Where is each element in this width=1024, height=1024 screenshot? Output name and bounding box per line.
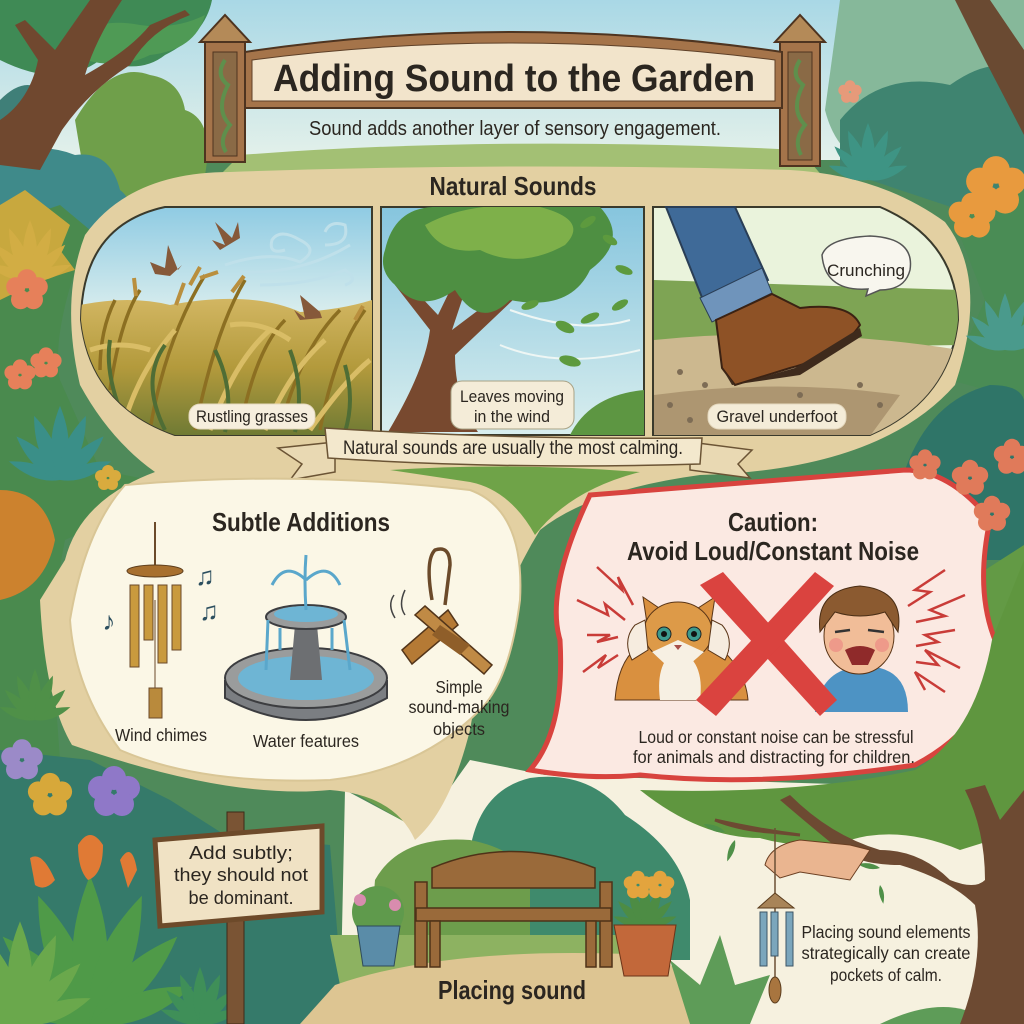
heading: placing sound: Placing sound xyxy=(438,975,586,1005)
heading: subtle additions: Subtle Additions xyxy=(212,507,390,537)
heading: natural sounds: Natural Sounds xyxy=(430,171,596,201)
winding path xyxy=(40,166,970,840)
panel: gravel underfoot xyxy=(653,207,960,436)
text: placing description xyxy=(802,922,971,985)
label: gravel underfoot xyxy=(708,404,846,429)
flowers: right side xyxy=(827,80,1024,531)
top-left foliage xyxy=(0,0,212,75)
icon: hand holding chime xyxy=(758,828,870,1003)
heading: caution: Caution: xyxy=(728,507,818,537)
green wedge under subtle panel xyxy=(350,770,445,828)
icon: music notes: ♫ xyxy=(195,561,215,591)
text: placing description: Placing sound elements xyxy=(802,922,971,942)
right tree top xyxy=(955,0,1024,135)
icon: fountain xyxy=(225,555,387,720)
sign: add subtly: they should not xyxy=(174,864,308,885)
panel: rustling grasses xyxy=(80,207,372,436)
label: simple sound-making objects: objects xyxy=(433,719,485,739)
banner: natural sounds are calming: Natural sounds are usually the most calming. xyxy=(343,438,683,459)
label: rustling grasses xyxy=(189,404,315,429)
icon: birds xyxy=(150,222,322,320)
icon: music notes xyxy=(102,561,219,636)
heading: caution: Avoid Loud/Constant Noise xyxy=(627,536,919,566)
sign: add subtly: Add subtly; xyxy=(189,842,293,863)
sign: add subtly: be dominant. xyxy=(188,887,294,908)
text: caution description: for animals and distracting for children. xyxy=(633,747,915,767)
title: Adding Sound to the Garden xyxy=(273,58,755,100)
grass tuft xyxy=(670,935,770,1024)
left tree xyxy=(0,0,190,170)
icon: terracotta flower pot xyxy=(612,871,678,976)
icon: boot and jeans xyxy=(666,207,862,385)
text: caution description: Loud or constant noise can be stressful xyxy=(638,727,914,747)
panel: caution xyxy=(530,470,995,780)
label: gravel underfoot: Gravel underfoot xyxy=(716,407,838,426)
icon: wind chimes xyxy=(127,522,183,718)
text: caution description xyxy=(633,727,915,767)
label: water features: Water features xyxy=(253,731,359,751)
top-right foliage xyxy=(825,0,1024,170)
label: wind chimes: Wind chimes xyxy=(115,725,207,745)
label: rustling grasses: Rustling grasses xyxy=(196,407,308,426)
panel: leaves in wind xyxy=(381,205,644,436)
icon: lightning bolts xyxy=(577,567,965,692)
sign: add subtly xyxy=(155,812,322,1024)
icon: crying child xyxy=(815,586,908,712)
label: simple sound-making objects xyxy=(408,677,510,739)
label: leaves moving in the wind: Leaves moving xyxy=(460,387,564,406)
label: leaves moving in the wind xyxy=(451,381,574,429)
label: simple sound-making objects: Simple xyxy=(436,677,482,697)
left column xyxy=(0,205,150,770)
icon: red cross xyxy=(696,572,837,716)
bushes behind bench xyxy=(470,777,690,960)
label: leaves moving in the wind: in the wind xyxy=(474,407,550,426)
right column xyxy=(950,190,1024,400)
bottom-left garden xyxy=(0,750,345,1024)
banner: natural sounds are calming xyxy=(278,428,752,480)
text: placing description: strategically can create xyxy=(802,943,970,963)
sign: title xyxy=(200,15,825,166)
right post xyxy=(775,15,825,166)
text: placing description: pockets of calm. xyxy=(830,965,942,985)
icon: wooden clapper xyxy=(391,549,492,674)
panel: subtle additions xyxy=(70,479,520,781)
icon: music notes: ♫ xyxy=(199,596,219,626)
subtitle: Sound adds another layer of sensory engagement. xyxy=(309,118,721,140)
right tree xyxy=(640,560,1024,1024)
icon: bench xyxy=(415,852,612,967)
bottom cream backdrop xyxy=(340,760,1024,1024)
label: simple sound-making objects: sound-making xyxy=(408,697,510,717)
heading: caution xyxy=(627,507,919,566)
icon: cat covering ears xyxy=(615,597,748,700)
icon: wind swirl xyxy=(225,224,352,285)
callout: crunching: Crunching xyxy=(827,261,905,280)
flowers: left side xyxy=(0,220,241,1024)
icon: blue flower pot xyxy=(352,886,404,966)
callout: crunching xyxy=(822,236,910,296)
icon: blowing leaves xyxy=(520,214,634,369)
icon: music notes: ♪ xyxy=(102,606,116,636)
left post xyxy=(200,15,250,162)
green gap under banner xyxy=(390,466,640,535)
bottom path xyxy=(300,953,720,1024)
